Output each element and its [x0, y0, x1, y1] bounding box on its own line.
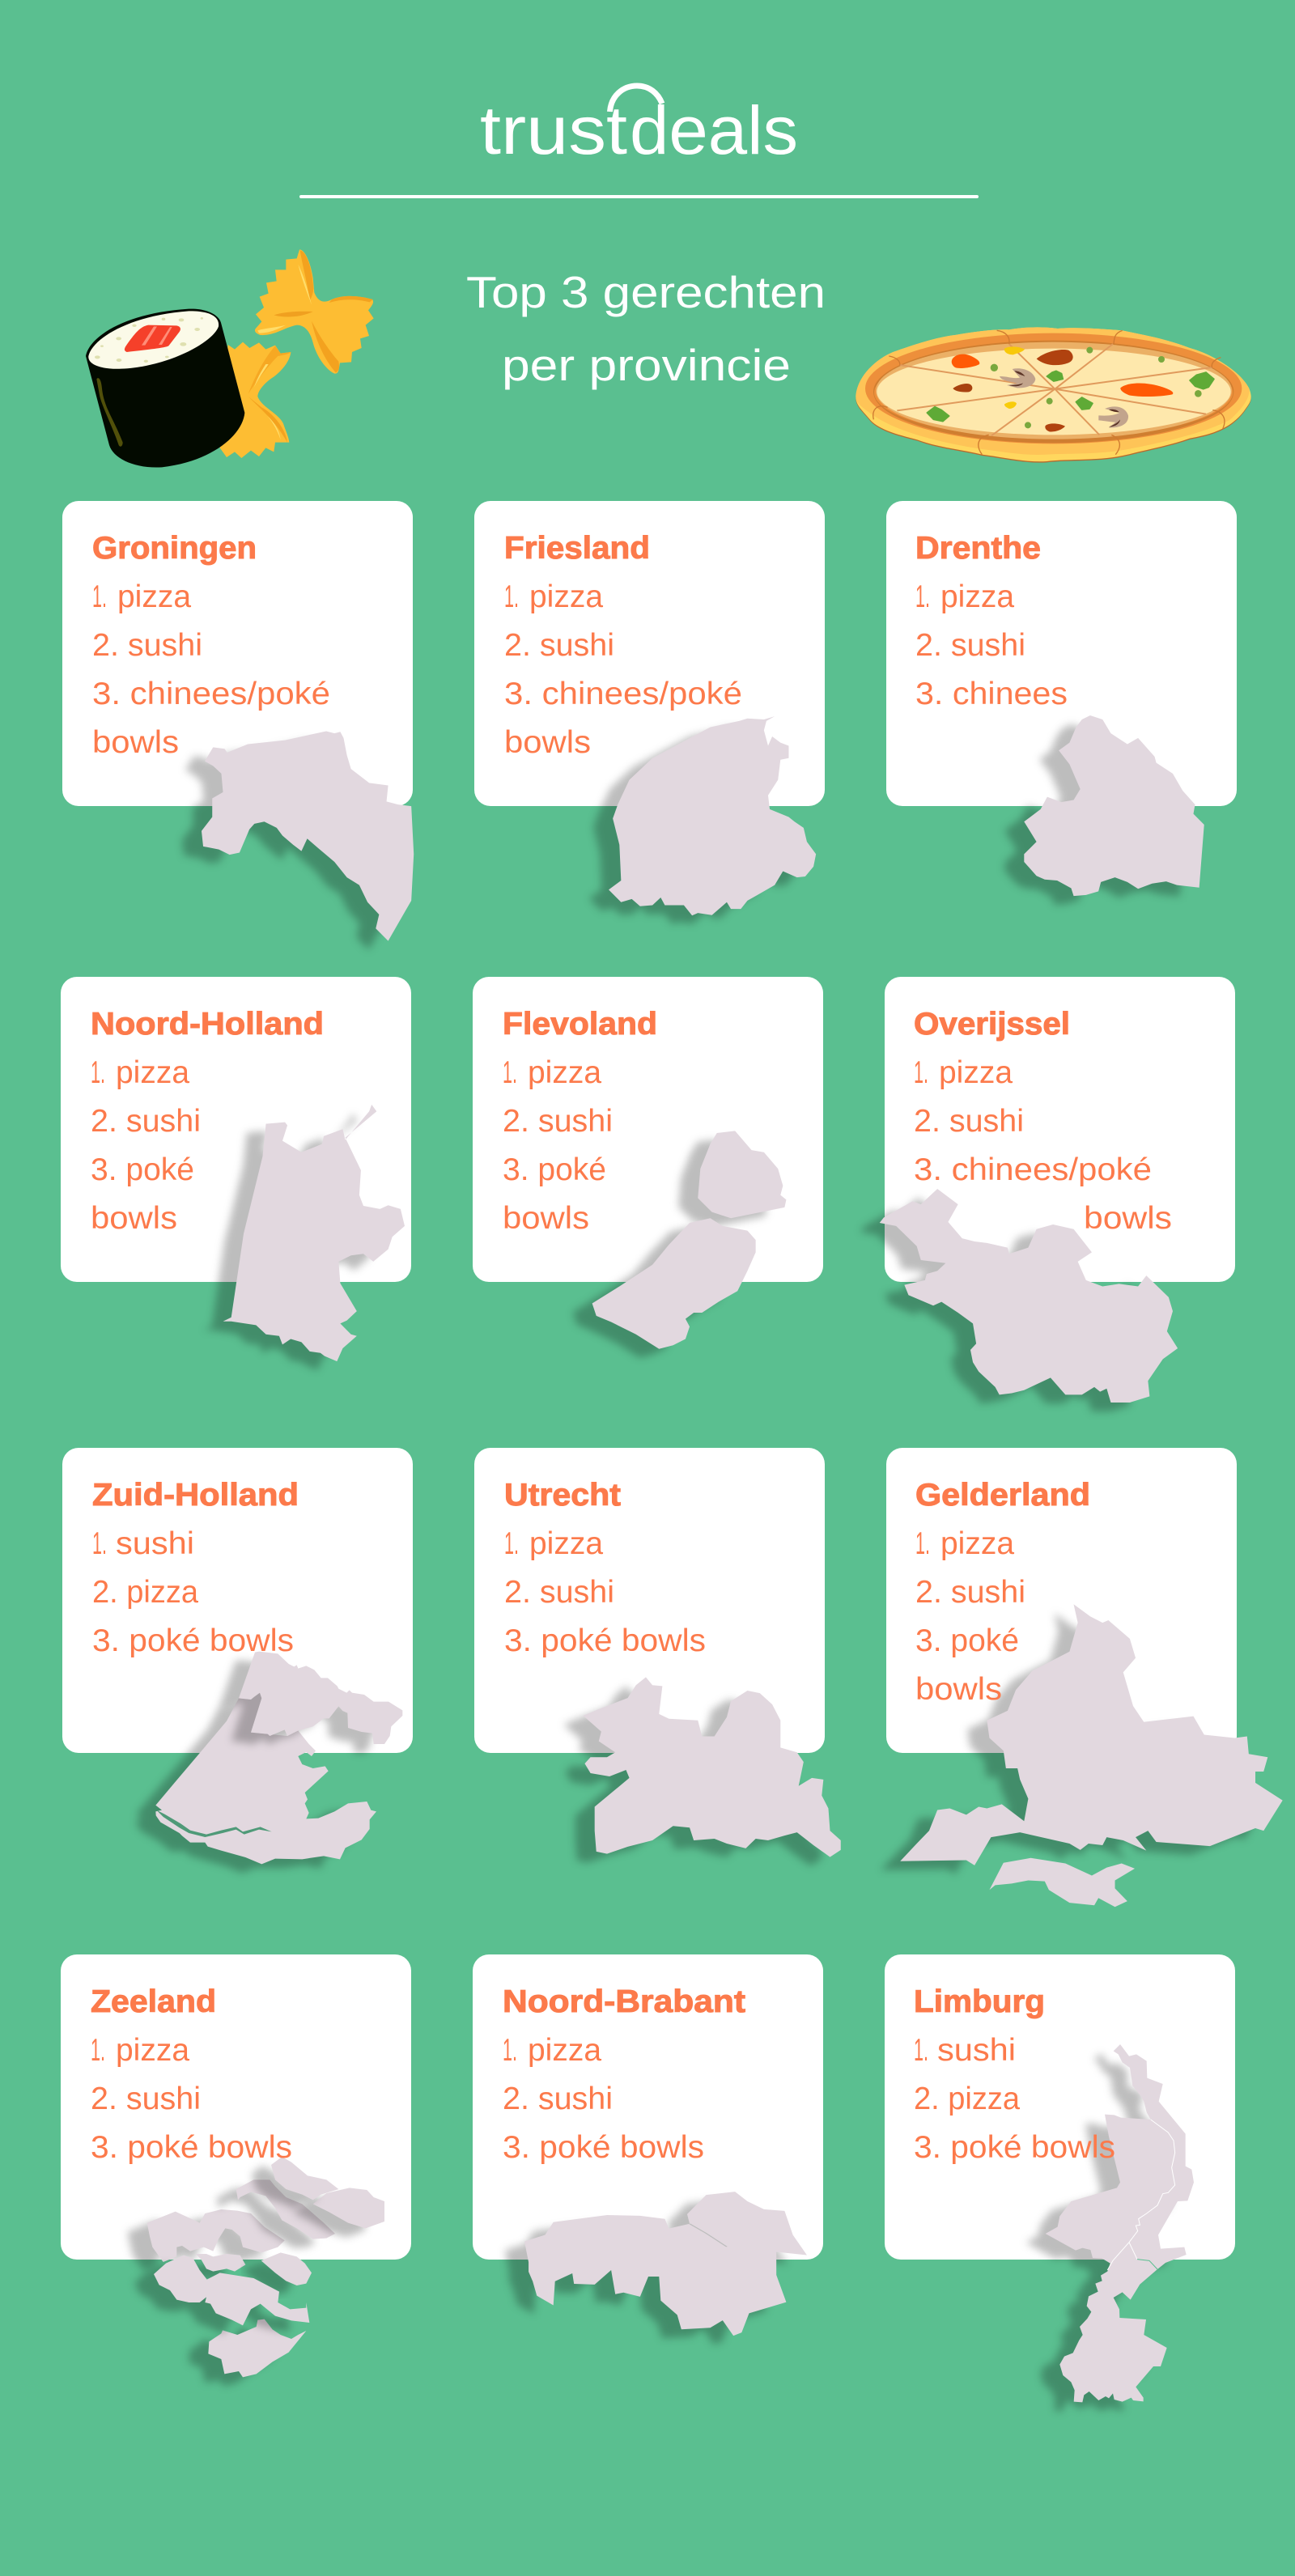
- text: Groningen list: pizza: [117, 579, 191, 614]
- panel: Overijssel: [880, 977, 1235, 1403]
- map: Gelderland: [900, 1604, 1283, 1907]
- text: Drenthe list: pizza: [940, 579, 1014, 614]
- title: Top 3 gerechten: [466, 267, 826, 317]
- text: Zeeland list: 2. sushi: [91, 2082, 201, 2116]
- text: Overijssel list: pizza: [939, 1055, 1013, 1090]
- panel: Utrecht: [474, 1448, 841, 1857]
- text: Noord-Brabant list: pizza: [528, 2033, 601, 2068]
- text: Overijssel list: bowls: [1084, 1201, 1172, 1236]
- text: Zeeland list: 3. poké bowls: [91, 2130, 292, 2165]
- text: Friesland list: Friesland: [504, 531, 650, 566]
- text: Noord-Holland list: Noord-Holland: [91, 1007, 324, 1042]
- text: Noord-Holland list: 3. poké: [91, 1152, 194, 1187]
- text: Groningen list: 2. sushi: [92, 628, 202, 663]
- text: Flevoland list: Flevoland: [503, 1007, 657, 1042]
- text: Gelderland list: 1.: [915, 1526, 930, 1561]
- panel: Flevoland: [473, 977, 823, 1349]
- text: Drenthe list: Drenthe: [915, 531, 1041, 566]
- text: Noord-Holland list: pizza: [116, 1055, 189, 1090]
- text: Limburg list: 1.: [914, 2033, 928, 2068]
- text: Overijssel list: 3. chinees/poké: [914, 1152, 1152, 1187]
- text: Noord-Brabant list: [503, 1984, 745, 2165]
- text: Groningen list: 3. chinees/poké: [92, 677, 330, 711]
- text: Zeeland list: 1.: [91, 2033, 105, 2068]
- text: Gelderland list: 2. sushi: [915, 1575, 1025, 1610]
- panel: Limburg: [885, 1954, 1235, 2402]
- logo: trustdeals: [480, 86, 798, 168]
- text: Overijssel list: Overijssel: [914, 1007, 1070, 1042]
- text: Noord-Brabant list: Noord-Brabant: [503, 1984, 745, 2019]
- text: Groningen list: [92, 531, 330, 760]
- text: Gelderland list: 3. poké: [915, 1623, 1019, 1658]
- panel: Noord-Brabant: [473, 1954, 823, 2336]
- text: Overijssel list: [914, 1007, 1172, 1236]
- text: Gelderland list: bowls: [915, 1672, 1002, 1707]
- logo: trustdeals: deals: [630, 92, 798, 168]
- icon: sushi roll and farfalle pasta: [86, 249, 374, 468]
- text: Drenthe list: 1.: [915, 579, 930, 614]
- text: Noord-Holland list: bowls: [91, 1201, 177, 1236]
- text: Flevoland list: bowls: [503, 1201, 589, 1236]
- map: Zuid-Holland: [155, 1652, 402, 1864]
- text: Limburg list: Limburg: [914, 1984, 1045, 2019]
- logo: trustdeals: trust: [480, 92, 627, 168]
- text: Noord-Brabant list: 3. poké bowls: [503, 2130, 704, 2165]
- map: Flevoland: [592, 1131, 786, 1349]
- map: Drenthe: [1024, 715, 1204, 896]
- text: Utrecht list: 3. poké bowls: [504, 1623, 706, 1658]
- map: Limburg: [1046, 2044, 1194, 2402]
- text: Groningen list: 1.: [92, 579, 107, 614]
- text: Friesland list: pizza: [529, 579, 603, 614]
- panel: Gelderland: [886, 1448, 1283, 1907]
- panel: Zuid-Holland: [62, 1448, 413, 1864]
- text: Zuid-Holland list: Zuid-Holland: [92, 1478, 299, 1513]
- text: Drenthe list: 3. chinees: [915, 677, 1068, 711]
- text: Friesland list: 2. sushi: [504, 628, 614, 663]
- panel: Drenthe: [886, 501, 1237, 896]
- text: Limburg list: sushi: [937, 2033, 1016, 2068]
- text: Groningen list: Groningen: [92, 531, 257, 566]
- text: Gelderland list: pizza: [940, 1526, 1014, 1561]
- map: Overijssel: [880, 1189, 1178, 1403]
- text: Friesland list: bowls: [504, 725, 591, 760]
- text: Limburg list: 2. pizza: [914, 2082, 1020, 2116]
- title: [466, 267, 826, 390]
- text: Utrecht list: [504, 1478, 706, 1658]
- text: Overijssel list: 1.: [914, 1055, 928, 1090]
- text: Noord-Brabant list: 1.: [503, 2033, 517, 2068]
- map: Zeeland: [147, 2157, 384, 2377]
- text: Noord-Holland list: [91, 1007, 324, 1236]
- map: Friesland: [609, 716, 816, 915]
- map: Noord-Holland: [223, 1105, 405, 1361]
- text: Zuid-Holland list: 3. poké bowls: [92, 1623, 294, 1658]
- text: Zuid-Holland list: sushi: [116, 1526, 194, 1561]
- text: Drenthe list: 2. sushi: [915, 628, 1025, 663]
- text: Zuid-Holland list: 2. pizza: [92, 1575, 198, 1610]
- map: Utrecht: [583, 1677, 841, 1857]
- text: Zeeland list: [91, 1984, 292, 2165]
- text: Flevoland list: 1.: [503, 1055, 517, 1090]
- text: Utrecht list: Utrecht: [504, 1478, 621, 1513]
- divider line: [299, 195, 979, 198]
- text: Zeeland list: pizza: [116, 2033, 189, 2068]
- text: Flevoland list: pizza: [528, 1055, 601, 1090]
- text: Flevoland list: 3. poké: [503, 1152, 606, 1187]
- text: Utrecht list: 1.: [504, 1526, 519, 1561]
- text: Noord-Holland list: 1.: [91, 1055, 105, 1090]
- text: Gelderland list: Gelderland: [915, 1478, 1090, 1513]
- panel: Friesland: [474, 501, 825, 915]
- icon: pizza: [856, 327, 1251, 463]
- text: Overijssel list: 2. sushi: [914, 1104, 1024, 1139]
- map: Groningen: [202, 731, 414, 941]
- text: Friesland list: 1.: [504, 579, 519, 614]
- text: Drenthe list: [915, 531, 1068, 711]
- text: Friesland list: [504, 531, 742, 760]
- panel: Zeeland: [61, 1954, 411, 2377]
- text: Groningen list: bowls: [92, 725, 179, 760]
- text: Flevoland list: 2. sushi: [503, 1104, 613, 1139]
- text: Utrecht list: 2. sushi: [504, 1575, 614, 1610]
- text: Noord-Holland list: 2. sushi: [91, 1104, 201, 1139]
- text: Friesland list: 3. chinees/poké: [504, 677, 742, 711]
- map: Noord-Brabant: [524, 2192, 807, 2336]
- text: Zuid-Holland list: 1.: [92, 1526, 107, 1561]
- text: Flevoland list: [503, 1007, 657, 1236]
- text: Limburg list: [914, 1984, 1115, 2165]
- text: Gelderland list: [915, 1478, 1090, 1707]
- text: Limburg list: 3. poké bowls: [914, 2130, 1115, 2165]
- text: Zeeland list: Zeeland: [91, 1984, 216, 2019]
- text: Noord-Brabant list: 2. sushi: [503, 2082, 613, 2116]
- title: per provincie: [502, 340, 791, 390]
- text: Utrecht list: pizza: [529, 1526, 603, 1561]
- panel: Noord-Holland: [61, 977, 411, 1361]
- text: Zuid-Holland list: [92, 1478, 299, 1658]
- panel: Groningen: [62, 501, 414, 941]
